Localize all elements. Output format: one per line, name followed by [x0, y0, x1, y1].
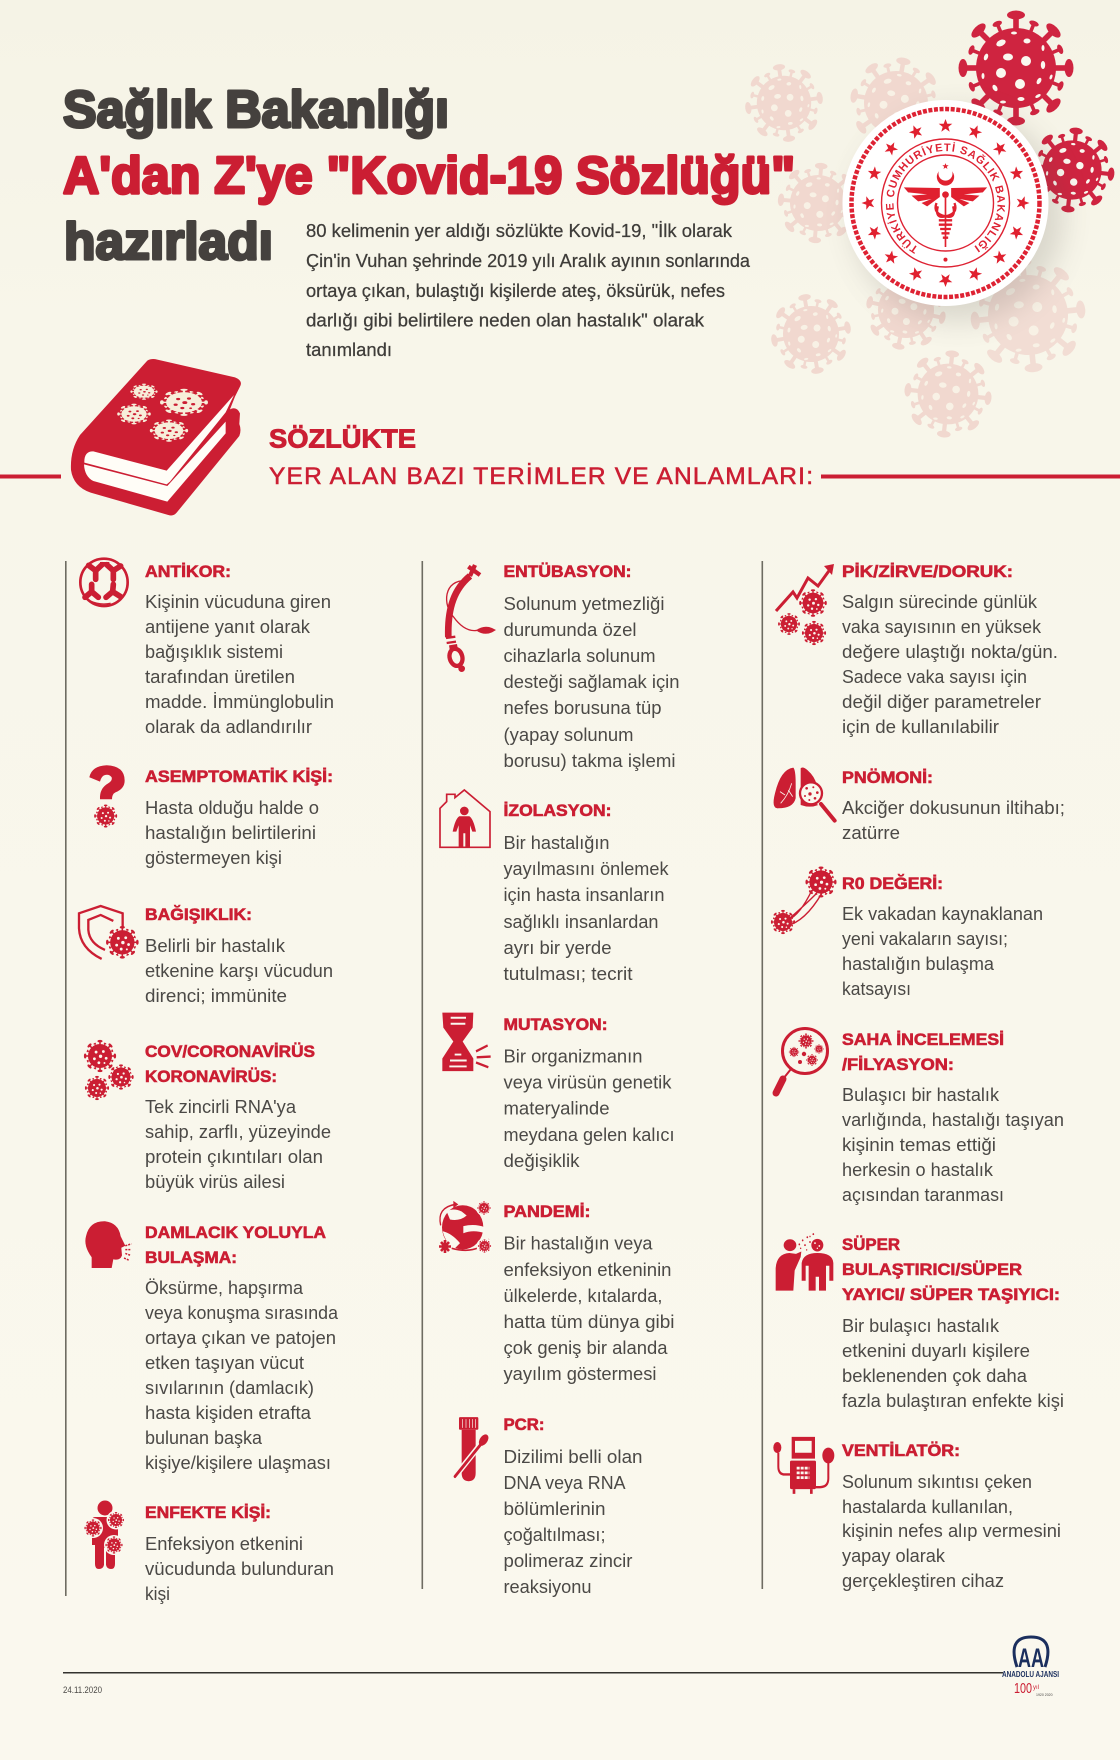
- definition: [145, 1533, 334, 1604]
- definition: [842, 591, 1058, 737]
- seal shadow: [852, 110, 1064, 322]
- intro text: 80 kelimenin yer aldığı sözlükte Kovid-19, "İlk olarak: [306, 220, 733, 241]
- icon: question mark with virus: [89, 765, 125, 827]
- definition: Bulaşıcı bir hastalık: [842, 1084, 1000, 1105]
- icon: ventilator machine: [773, 1437, 834, 1494]
- heading: SÜPER: [842, 1235, 900, 1254]
- definition: Bir hastalığın veya: [504, 1232, 653, 1254]
- definition: [842, 1084, 1064, 1205]
- definition: Bir bulaşıcı hastalık: [842, 1315, 1000, 1336]
- term: VENTİLATÖR: [773, 1437, 1061, 1591]
- heading: PNÖMONİ:: [842, 768, 933, 787]
- virus: large top right: [958, 10, 1074, 126]
- section heading: [269, 424, 813, 490]
- intro text: ortaya çıkan, bulaştığı kişilerde ateş, öksürük, nefes: [306, 280, 725, 301]
- definition: varlığında, hastalığı taşıyan: [842, 1109, 1064, 1130]
- icon: lungs and magnifier: [774, 767, 835, 821]
- definition: çok geniş bir alanda: [504, 1337, 668, 1358]
- icon: coughing head: [85, 1221, 131, 1268]
- definition: [842, 903, 1043, 999]
- heading: PANDEMİ:: [504, 1203, 590, 1221]
- definition: bulunan başka: [145, 1427, 263, 1448]
- heading: [842, 1031, 1004, 1074]
- term: MUTASYON: [442, 1013, 674, 1171]
- term: PNÖMONİ: [774, 767, 1065, 843]
- heading: MUTASYON:: [504, 1016, 608, 1034]
- icon: book: [71, 359, 241, 515]
- title: Sağlık Bakanlığı: [63, 81, 449, 139]
- definition: katsayısı: [842, 978, 911, 999]
- definition: [145, 935, 333, 1006]
- definition: [145, 1096, 331, 1192]
- term: R0 DEĞERİ: [771, 866, 1043, 999]
- definition: Dizilimi belli olan: [504, 1446, 642, 1467]
- heading: [842, 1235, 1060, 1304]
- definition: açısından taranması: [842, 1184, 1004, 1205]
- definition: veya virüsün genetik: [504, 1072, 672, 1092]
- definition: sağlıklı insanlardan: [504, 911, 658, 932]
- term: SÜPER BULAŞTIRICI: [776, 1233, 1064, 1411]
- definition: Tek zincirli RNA'ya: [145, 1096, 297, 1117]
- heading: DAMLACIK YOLUYLA: [145, 1224, 326, 1242]
- definition: tutulması; tecrit: [504, 963, 632, 984]
- title: [63, 81, 795, 271]
- definition: protein çıkıntıları olan: [145, 1146, 323, 1167]
- definition: madde. İmmünglobulin: [145, 691, 334, 712]
- definition: [145, 591, 334, 737]
- term: SAHA İNCELEMESİ / FİLYASYON: [776, 1028, 1064, 1205]
- term: ENFEKTE KİŞİ: [83, 1500, 334, 1604]
- definition: vücudunda bulunduran: [145, 1558, 334, 1579]
- definition: polimeraz zincir: [504, 1550, 632, 1571]
- definition: ayrı bir yerde: [504, 937, 612, 958]
- definition: Sadece vaka sayısı için: [842, 666, 1027, 687]
- definition: kişinin temas ettiği: [842, 1134, 996, 1155]
- column rules: [65, 561, 763, 1596]
- definition: zatürre: [842, 822, 900, 843]
- definition: tarafından üretilen: [145, 666, 295, 687]
- definition: herkesin o hastalık: [842, 1159, 994, 1180]
- definition: durumunda özel: [504, 619, 636, 640]
- definition: [842, 1471, 1061, 1591]
- definition: sıvılarının (damlacık): [145, 1377, 314, 1398]
- intro text: darlığı gibi belirtilere neden olan hastalık" olarak: [306, 310, 705, 330]
- definition: yayılım göstermesi: [504, 1363, 656, 1384]
- definition: veya konuşma sırasında: [145, 1302, 339, 1323]
- heading: [145, 1042, 315, 1086]
- definition: etken taşıyan vücut: [145, 1352, 304, 1373]
- definition: reaksiyonu: [504, 1576, 592, 1597]
- heading: İZOLASYON:: [504, 802, 612, 820]
- definition: [504, 593, 680, 771]
- intro text: [306, 220, 751, 360]
- definition: borusu) takma işlemi: [504, 750, 676, 771]
- definition: [145, 797, 319, 868]
- definition: Salgın sürecinde günlük: [842, 591, 1038, 612]
- definition: [504, 832, 669, 984]
- heading: BAĞIŞIKLIK:: [145, 905, 252, 924]
- term: ANTİKOR: [80, 559, 334, 737]
- heading: ANTİKOR:: [145, 563, 231, 581]
- definition: cihazlarla solunum: [504, 645, 656, 666]
- seal: Sağlık Bakanlığı: TÜRKİYE CUMHURİYETİ SAĞLIK BAKANLIĞI: [886, 142, 1006, 254]
- definition: sahip, zarflı, yüzeyinde: [145, 1121, 331, 1142]
- title: A'dan Z'ye "Kovid-19 Sözlüğü": [63, 147, 795, 205]
- heading: KORONAVİRÜS:: [145, 1067, 277, 1086]
- virus: small right: [1025, 123, 1119, 217]
- definition: desteği sağlamak için: [504, 671, 680, 692]
- definition: değişiklik: [504, 1150, 580, 1171]
- icon: globe with viruses: [439, 1200, 492, 1254]
- definition: hastalarda kullanılan,: [842, 1496, 1013, 1517]
- definition: hasta kişiden etrafta: [145, 1402, 312, 1423]
- definition: Bir hastalığın: [504, 832, 610, 853]
- definition: için de kullanılabilir: [842, 716, 999, 737]
- heading: SAHA İNCELEMESİ: [842, 1031, 1004, 1049]
- icon: two people with spray: [776, 1233, 833, 1291]
- definition: Kişinin vücuduna giren: [145, 591, 331, 612]
- definition: değere ulaştığı nokta/gün.: [842, 641, 1058, 662]
- heading: R0 DEĞERİ:: [842, 874, 943, 893]
- definition: ortaya çıkan ve patojen: [145, 1327, 336, 1348]
- logo: Anadolu Ajansı: ANADOLU AJANSI: [1002, 1670, 1059, 1679]
- definition: kişinin nefes alıp vermesini: [842, 1520, 1061, 1541]
- heading: ENTÜBASYON:: [504, 562, 632, 581]
- icon: shield with virus: [79, 906, 139, 959]
- icon: DNA: [442, 1013, 491, 1071]
- definition: [504, 1446, 642, 1597]
- definition: Bir organizmanın: [504, 1046, 642, 1066]
- definition: fazla bulaştıran enfekte kişi: [842, 1390, 1064, 1411]
- heading: BULAŞTIRICI/SÜPER: [842, 1260, 1022, 1279]
- definition: yapay olarak: [842, 1545, 946, 1566]
- definition: [842, 1315, 1064, 1411]
- logo: Anadolu Ajansı: 1920 2020: [1036, 1693, 1053, 1697]
- definition: etkenini duyarlı kişilere: [842, 1340, 1030, 1361]
- definition: Enfeksiyon etkenini: [145, 1533, 303, 1554]
- logo: Anadolu Ajansı: AA: [1018, 1643, 1044, 1673]
- definition: meydana gelen kalıcı: [504, 1124, 674, 1145]
- intro text: tanımlandı: [306, 339, 392, 360]
- definition: kişi: [145, 1583, 170, 1604]
- definition: materyalinde: [504, 1098, 610, 1118]
- definition: enfeksiyon etkeninin: [504, 1259, 672, 1280]
- icon: magnifier with viruses: [776, 1028, 828, 1093]
- definition: Öksürme, hapşırma: [145, 1277, 304, 1298]
- term: COV/CORONAVİRÜS: [84, 1040, 331, 1192]
- definition: bölümlerinin: [504, 1498, 606, 1519]
- definition: göstermeyen kişi: [145, 847, 282, 868]
- icon: three viruses: [84, 1040, 134, 1100]
- definition: (yapay solunum: [504, 724, 634, 745]
- term: PCR: [455, 1416, 642, 1597]
- definition: DNA veya RNA: [504, 1472, 626, 1493]
- icon: spreading viruses: [771, 866, 837, 934]
- term: PANDEMİ: [439, 1200, 674, 1384]
- section rule left: [0, 474, 61, 478]
- definition: Akciğer dokusunun iltihabı;: [842, 797, 1065, 818]
- term: BAĞIŞIKLIK: [79, 905, 333, 1006]
- definition: Ek vakadan kaynaklanan: [842, 903, 1043, 924]
- logo: Anadolu Ajansı: yıl: [1033, 1685, 1039, 1691]
- heading: YAYICI/ SÜPER TAŞIYICI:: [842, 1285, 1060, 1304]
- definition: [842, 797, 1065, 843]
- definition: nefes borusuna tüp: [504, 697, 662, 718]
- logo: Anadolu Ajansı: [1002, 1637, 1059, 1697]
- definition: antijene yanıt olarak: [145, 616, 311, 637]
- section heading: SÖZLÜKTE: [269, 424, 416, 454]
- heading: ASEMPTOMATİK KİŞİ:: [145, 768, 333, 786]
- logo: Anadolu Ajansı: 100: [1014, 1680, 1032, 1697]
- definition: hastalığın bulaşma: [842, 953, 995, 974]
- icon: rising chart with viruses: [776, 564, 834, 645]
- definition: ülkelerde, kıtalarda,: [504, 1285, 662, 1306]
- definition: olarak da adlandırılır: [145, 716, 312, 737]
- definition: hatta tüm dünya gibi: [504, 1311, 674, 1332]
- definition: etkenine karşı vücudun: [145, 960, 333, 981]
- section rule right: [821, 474, 1120, 478]
- definition: beklenenden çok daha: [842, 1365, 1028, 1386]
- icon: infected person: [83, 1500, 126, 1569]
- footer rule: [63, 1672, 1003, 1674]
- definition: değil diğer parametreler: [842, 691, 1041, 712]
- definition: çoğaltılması;: [504, 1524, 606, 1545]
- icon: antibody: [80, 559, 128, 606]
- intro text: Çin'in Vuhan şehrinde 2019 yılı Aralık ayının sonlarında: [306, 250, 751, 271]
- definition: gerçekleştiren cihaz: [842, 1570, 1004, 1591]
- heading: BULAŞMA:: [145, 1249, 237, 1267]
- heading: VENTİLATÖR:: [842, 1441, 960, 1460]
- definition: Solunum yetmezliği: [504, 593, 664, 614]
- icon: test tube and swab: [455, 1417, 490, 1481]
- icon: intubation tube: [446, 565, 496, 672]
- pale virus decoration: [740, 50, 1091, 442]
- term: ENTÜBASYON: [446, 562, 680, 771]
- date: 24.11.2020: [63, 1685, 102, 1695]
- definition: [504, 1232, 674, 1384]
- definition: direnci; immünite: [145, 985, 287, 1006]
- term: DAMLACIK YOLUYLA BULAŞMA: [85, 1221, 339, 1473]
- definition: vaka sayısının en yüksek: [842, 616, 1042, 637]
- definition: için hasta insanların: [504, 884, 664, 905]
- definition: Solunum sıkıntısı çeken: [842, 1471, 1032, 1492]
- definition: büyük virüs ailesi: [145, 1171, 285, 1192]
- definition: bağışıklık sistemi: [145, 641, 283, 662]
- definition: Hasta olduğu halde o: [145, 797, 319, 818]
- definition: [504, 1046, 674, 1171]
- definition: Belirli bir hastalık: [145, 935, 286, 956]
- heading: PİK/ZİRVE/DORUK:: [842, 563, 1013, 581]
- definition: yayılmasını önlemek: [504, 858, 669, 879]
- seal: Sağlık Bakanlığı: [842, 100, 1048, 306]
- definition: yeni vakaların sayısı;: [842, 928, 1008, 949]
- section heading: YER ALAN BAZI TERİMLER VE ANLAMLARI:: [269, 463, 813, 490]
- icon: person in house: [440, 790, 490, 847]
- title: hazırladı: [64, 213, 273, 271]
- heading: PCR:: [504, 1416, 544, 1434]
- definition: [145, 1277, 339, 1473]
- term: PİK/ZİRVE/DORUK: [776, 563, 1058, 737]
- heading: [145, 1224, 326, 1267]
- heading: COV/CORONAVİRÜS: [145, 1042, 315, 1061]
- term: ASEMPTOMATİK KİŞİ: [89, 765, 333, 868]
- term: İZOLASYON: [440, 790, 669, 984]
- heading: /FİLYASYON:: [842, 1056, 954, 1074]
- heading: ENFEKTE KİŞİ:: [145, 1504, 271, 1522]
- definition: kişiye/kişilere ulaşması: [145, 1452, 331, 1473]
- definition: hastalığın belirtilerini: [145, 822, 316, 843]
